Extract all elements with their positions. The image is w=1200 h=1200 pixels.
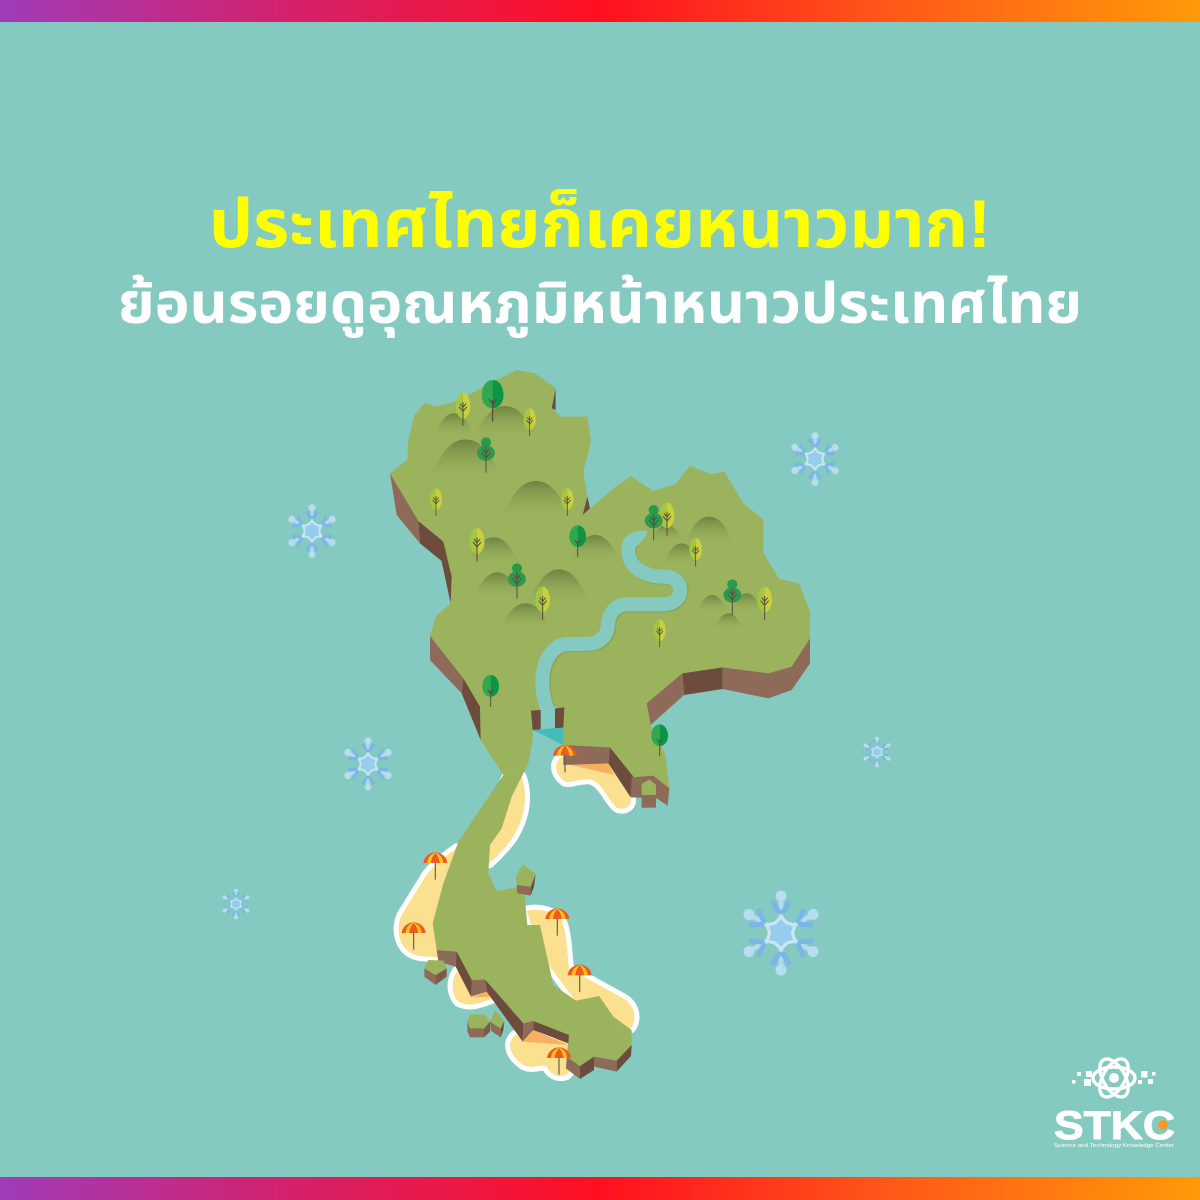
snowflake lower left: [342, 737, 394, 791]
south-eastern cliffs: [563, 745, 669, 808]
river: [542, 531, 682, 711]
beach umbrellas: [402, 745, 592, 1075]
title: ประเทศไทยก็เคยหนาวมาก!: [209, 186, 991, 262]
northern and central land: [390, 370, 810, 808]
snowflake upper right: [789, 432, 841, 486]
map of Thailand: [390, 370, 810, 1079]
snowflake large: [740, 890, 822, 976]
trees: [430, 380, 772, 756]
logo wordmark: STKC: [1054, 1104, 1175, 1148]
snowflake small right: [862, 737, 892, 767]
beaches: [399, 757, 635, 1076]
logo STKC: [1054, 1054, 1175, 1149]
subtitle: ย้อนรอยดูอุณหภูมิหน้าหนาวประเทศไทย: [118, 272, 1082, 338]
snowflake left: [286, 504, 338, 558]
southern peninsula: [402, 745, 632, 1079]
cliffs: [390, 388, 810, 740]
logo tagline: Science and Technology Knowledge Center: [1054, 1143, 1174, 1149]
peninsula cliffs: [437, 950, 632, 1079]
house: [642, 779, 656, 808]
logo dot: [1158, 1120, 1168, 1130]
islands: [424, 864, 536, 1037]
logo atom icon: [1072, 1054, 1156, 1102]
river mouth: [531, 707, 564, 745]
top gradient bar: [0, 0, 1200, 22]
bottom gradient bar: [0, 1177, 1200, 1200]
snowflake small left: [221, 889, 251, 919]
mountains: [427, 406, 763, 630]
